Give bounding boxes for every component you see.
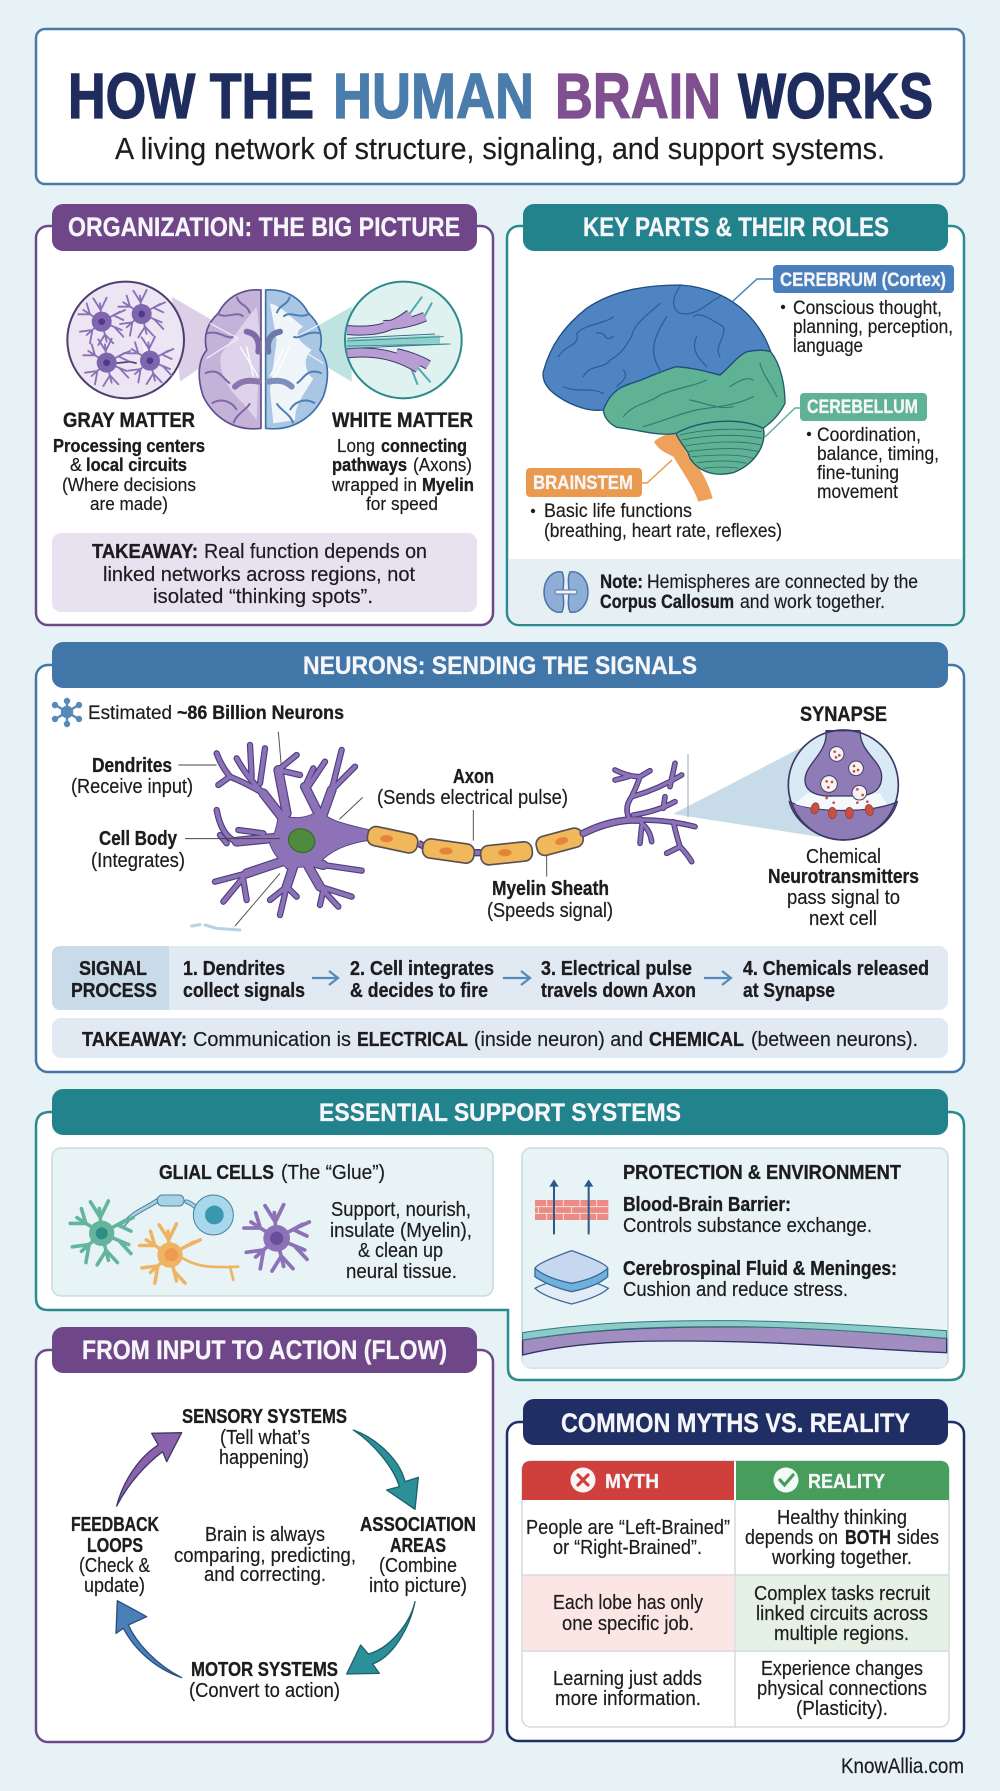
node: feedback loops: FEEDBACK bbox=[71, 1514, 159, 1536]
row 3 bbox=[553, 1658, 927, 1720]
signal process strip: 3. Electrical pulse bbox=[541, 958, 692, 980]
text: glial role: insulate (Myelin), bbox=[330, 1219, 472, 1242]
row 3: (Plasticity). bbox=[796, 1698, 888, 1720]
heading: neurons: NEURONS: SENDING THE SIGNALS bbox=[303, 652, 697, 680]
text: synapse: pass signal to bbox=[787, 886, 900, 909]
row 3: Experience changes bbox=[761, 1658, 923, 1680]
text: white matter: Myelin bbox=[422, 475, 474, 495]
node: feedback loops: LOOPS bbox=[87, 1535, 143, 1557]
heading: key parts bbox=[523, 204, 948, 251]
callout: neuron takeaway: TAKEAWAY: bbox=[82, 1028, 187, 1051]
label: cerebrum: planning, perception, bbox=[793, 316, 953, 338]
panel: input to action flow bbox=[36, 1327, 493, 1742]
node: association areas: into picture) bbox=[369, 1575, 467, 1597]
text: gray matter: local circuits bbox=[86, 455, 187, 475]
text: white matter: wrapped in bbox=[331, 475, 417, 495]
node: feedback loops bbox=[71, 1514, 159, 1597]
note: hemispheres: Note: bbox=[600, 571, 643, 593]
signal process strip: 2. Cell integrates bbox=[350, 958, 494, 980]
labels: neuron parts: (Speeds signal) bbox=[487, 900, 613, 922]
layered membrane wave bbox=[523, 1321, 947, 1368]
signal process strip: travels down Axon bbox=[541, 980, 696, 1002]
card: glial cells: GLIAL CELLS bbox=[159, 1161, 274, 1184]
text: gray matter bbox=[53, 409, 205, 514]
label: cerebellum: fine-tuning bbox=[817, 462, 899, 484]
callout: neuron takeaway bbox=[52, 1018, 948, 1058]
text: synapse: SYNAPSE bbox=[800, 703, 887, 726]
node: sensory systems bbox=[182, 1406, 347, 1469]
label: cerebellum: balance, timing, bbox=[817, 443, 939, 465]
text: gray matter: Processing centers bbox=[53, 436, 205, 456]
row 3: Learning just adds bbox=[553, 1668, 702, 1690]
row 3: more information. bbox=[555, 1688, 701, 1710]
table: myth and reality: REALITY bbox=[808, 1471, 886, 1493]
text: neuron count: ~86 Billion Neurons bbox=[177, 702, 344, 724]
heading: essential support: ESSENTIAL SUPPORT SYSTEMS bbox=[319, 1099, 681, 1127]
label: cerebellum bbox=[765, 393, 939, 503]
label: cerebrum bbox=[733, 265, 954, 357]
row 1: sides bbox=[897, 1527, 939, 1549]
text: cycle center: and correcting. bbox=[204, 1564, 326, 1586]
icon: gray matter circle bbox=[67, 282, 184, 398]
labels: neuron parts bbox=[71, 755, 613, 922]
signal process strip: PROCESS bbox=[71, 979, 157, 1002]
labels: neuron parts: Axon bbox=[453, 766, 494, 788]
heading: myths: COMMON MYTHS VS. REALITY bbox=[561, 1408, 910, 1438]
icon: small neuron bbox=[53, 699, 81, 726]
note: hemispheres: and work together. bbox=[740, 591, 885, 613]
row 2: Complex tasks recruit bbox=[754, 1583, 930, 1605]
note strip background bbox=[509, 559, 962, 624]
label: cerebellum: Coordination, bbox=[817, 424, 921, 446]
node: sensory systems: happening) bbox=[219, 1447, 309, 1469]
icon: reality check bbox=[774, 1468, 798, 1492]
icon: coronal brain section bbox=[199, 290, 327, 429]
text: gray matter: are made) bbox=[90, 494, 168, 514]
node: feedback loops: update) bbox=[84, 1575, 145, 1597]
labels: neuron parts: Cell Body bbox=[99, 828, 178, 850]
heading: neurons bbox=[52, 642, 948, 688]
myelin segments bbox=[366, 825, 585, 866]
text: white matter: WHITE MATTER bbox=[332, 409, 473, 432]
text: white matter: Long bbox=[337, 436, 375, 456]
row 1: Healthy thinking bbox=[777, 1507, 907, 1529]
panel: organization bbox=[36, 204, 493, 625]
label: cerebellum: CEREBELLUM bbox=[807, 396, 918, 418]
callout: neuron takeaway: (between neurons). bbox=[751, 1028, 918, 1051]
label: cerebrum: language bbox=[793, 335, 863, 357]
text: glial role: & clean up bbox=[358, 1239, 443, 1262]
callout: neuron takeaway: CHEMICAL bbox=[649, 1028, 744, 1051]
illustration: side view brain bbox=[543, 285, 785, 502]
callout: organization takeaway: isolated “thinking spots”. bbox=[153, 585, 373, 608]
title bbox=[68, 60, 933, 132]
arrows between steps bbox=[312, 971, 731, 985]
row 1: People are “Left-Brained” bbox=[526, 1517, 730, 1539]
heading: essential support bbox=[52, 1089, 948, 1135]
neuron cell body and dendrites bbox=[178, 732, 585, 930]
panel: key parts bbox=[507, 204, 964, 625]
node: association areas bbox=[360, 1514, 476, 1597]
label: brainstem: (breathing, heart rate, reflexes) bbox=[544, 520, 782, 542]
node: association areas: AREAS bbox=[390, 1535, 446, 1557]
panel: essential support systems bbox=[36, 1089, 964, 1380]
heading: myths bbox=[523, 1399, 948, 1445]
card: glial cells: (The “Glue”) bbox=[281, 1161, 385, 1184]
axon terminals bbox=[583, 763, 695, 862]
text: gray matter: GRAY MATTER bbox=[63, 409, 195, 432]
text: gray matter: (Where decisions bbox=[62, 475, 196, 495]
heading: flow: FROM INPUT TO ACTION (FLOW) bbox=[82, 1335, 447, 1365]
text: gray matter: & bbox=[70, 455, 82, 475]
label: brainstem: BRAINSTEM bbox=[533, 472, 633, 494]
diagram: gray and white matter brain bbox=[67, 282, 462, 429]
signal process strip: at Synapse bbox=[743, 980, 835, 1002]
callout: organization takeaway: Real function depends on bbox=[204, 540, 427, 563]
text: glial role: Support, nourish, bbox=[331, 1198, 471, 1221]
illustration: glial cells bbox=[70, 1195, 309, 1283]
panel: myths vs reality bbox=[507, 1399, 964, 1741]
row 2 bbox=[553, 1583, 930, 1645]
text: neuron count bbox=[88, 702, 344, 724]
node: sensory systems: (Tell what’s bbox=[220, 1427, 310, 1449]
text: cycle center bbox=[174, 1524, 356, 1586]
callout: organization takeaway: linked networks across regions, not bbox=[103, 563, 415, 586]
card: glial cells bbox=[52, 1148, 493, 1296]
heading: flow bbox=[52, 1327, 477, 1373]
text: white matter: (Axons) bbox=[413, 455, 472, 475]
row 1: BOTH bbox=[845, 1527, 891, 1549]
row 3: physical connections bbox=[757, 1678, 927, 1700]
arrows: flow cycle bbox=[116, 1430, 418, 1678]
row 1: or “Right-Brained”. bbox=[553, 1537, 702, 1559]
node: association areas: ASSOCIATION bbox=[360, 1514, 476, 1536]
node: motor systems bbox=[189, 1659, 340, 1702]
labels: neuron parts: Dendrites bbox=[92, 755, 172, 777]
signal process strip: & decides to fire bbox=[350, 980, 488, 1002]
signal process strip: SIGNAL bbox=[79, 957, 147, 980]
note: hemispheres: Hemispheres are connected by the bbox=[647, 571, 918, 593]
text: glial role: neural tissue. bbox=[346, 1260, 457, 1283]
signal process strip: collect signals bbox=[183, 980, 305, 1002]
row 2: linked circuits across bbox=[756, 1603, 928, 1625]
row 2: multiple regions. bbox=[774, 1623, 909, 1645]
text: synapse: next cell bbox=[809, 907, 877, 930]
footer credit: KnowAllia.com bbox=[841, 1755, 964, 1778]
heading: organization bbox=[52, 204, 477, 251]
text: glial role bbox=[330, 1198, 472, 1283]
table: myth and reality bbox=[522, 1461, 949, 1727]
text: protection: PROTECTION & ENVIRONMENT bbox=[623, 1161, 901, 1184]
text: protection: Cushion and reduce stress. bbox=[623, 1278, 848, 1301]
text: synapse bbox=[768, 703, 919, 930]
node: sensory systems: SENSORY SYSTEMS bbox=[182, 1406, 347, 1428]
row 1 bbox=[526, 1507, 939, 1569]
icon: corpus callosum bbox=[544, 572, 588, 612]
labels: neuron parts: Myelin Sheath bbox=[492, 878, 609, 900]
labels: neuron parts: (Sends electrical pulse) bbox=[377, 787, 568, 809]
node: feedback loops: (Check & bbox=[79, 1555, 151, 1577]
subtitle: A living network of structure, signaling, and support systems. bbox=[115, 131, 885, 166]
signal process strip: 4. Chemicals released bbox=[743, 958, 929, 980]
callout: organization takeaway bbox=[52, 533, 477, 612]
node: motor systems: MOTOR SYSTEMS bbox=[191, 1659, 338, 1681]
icon: myth x bbox=[570, 1468, 596, 1492]
icon: white matter circle bbox=[345, 282, 462, 398]
text: white matter: for speed bbox=[366, 494, 438, 514]
title: HUMAN bbox=[333, 60, 534, 132]
note: hemispheres: Corpus Callosum bbox=[600, 591, 734, 613]
icon: synapse circle bbox=[788, 730, 898, 840]
icon: cushion layers bbox=[535, 1251, 608, 1304]
title: BRAIN bbox=[555, 60, 721, 132]
illustration: neuron bbox=[178, 732, 820, 930]
callout: neuron takeaway: Communication is bbox=[193, 1028, 351, 1051]
title: HOW THE bbox=[68, 60, 314, 132]
label: brainstem: Basic life functions bbox=[544, 500, 692, 522]
icon: brick barrier bbox=[535, 1179, 608, 1234]
table: myth and reality: MYTH bbox=[605, 1471, 659, 1493]
text: cycle center: Brain is always bbox=[205, 1524, 325, 1546]
row 2: Each lobe has only bbox=[553, 1592, 703, 1614]
title: WORKS bbox=[738, 60, 933, 132]
label: cerebrum: CEREBRUM (Cortex) bbox=[780, 269, 946, 291]
text: protection: Blood-Brain Barrier: bbox=[623, 1193, 791, 1216]
row 2: one specific job. bbox=[562, 1613, 694, 1635]
labels: neuron parts: (Receive input) bbox=[71, 776, 193, 798]
callout: organization takeaway: TAKEAWAY: bbox=[92, 540, 198, 563]
text: cycle center: comparing, predicting, bbox=[174, 1545, 356, 1567]
node: association areas: (Combine bbox=[379, 1555, 457, 1577]
callout: neuron takeaway: ELECTRICAL bbox=[357, 1028, 468, 1051]
text: white matter: pathways bbox=[332, 455, 407, 475]
text: synapse: Chemical bbox=[806, 845, 881, 868]
signal process strip bbox=[52, 946, 948, 1010]
heading: organization: ORGANIZATION: THE BIG PICTURE bbox=[68, 212, 460, 242]
signal process strip: 1. Dendrites bbox=[183, 958, 285, 980]
title panel bbox=[36, 29, 964, 184]
card: protection and environment bbox=[522, 1148, 948, 1368]
text: white matter bbox=[331, 409, 474, 514]
labels: neuron parts: (Integrates) bbox=[91, 850, 185, 872]
text: protection bbox=[623, 1161, 901, 1301]
panel: neurons bbox=[36, 642, 964, 1072]
row 1: depends on bbox=[745, 1527, 838, 1549]
text: protection: Cerebrospinal Fluid & Meninges: bbox=[623, 1257, 897, 1280]
synapse zoom cone bbox=[673, 743, 820, 837]
text: white matter: connecting bbox=[381, 436, 467, 456]
callout: neuron takeaway: (inside neuron) and bbox=[474, 1028, 643, 1051]
text: protection: Controls substance exchange. bbox=[623, 1214, 872, 1237]
text: synapse: Neurotransmitters bbox=[768, 865, 919, 888]
node: motor systems: (Convert to action) bbox=[189, 1680, 340, 1702]
label: brainstem bbox=[526, 460, 782, 542]
row 1: working together. bbox=[771, 1547, 912, 1569]
text: neuron count: Estimated bbox=[88, 702, 172, 724]
label: cerebellum: movement bbox=[817, 481, 899, 503]
heading: key parts: KEY PARTS & THEIR ROLES bbox=[583, 212, 889, 242]
label: cerebrum: Conscious thought, bbox=[793, 297, 942, 319]
note: hemispheres bbox=[600, 571, 918, 613]
